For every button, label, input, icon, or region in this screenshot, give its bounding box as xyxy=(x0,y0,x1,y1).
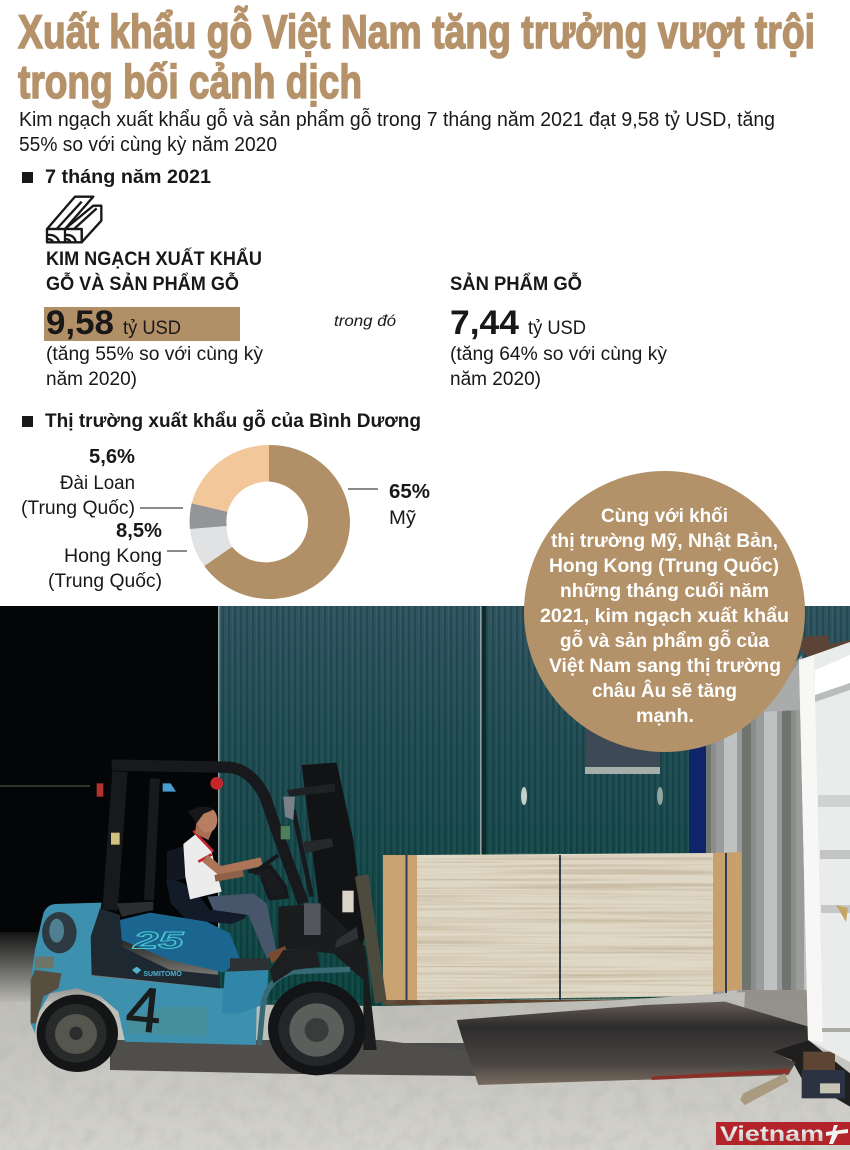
forklift rear counterweight and chassis xyxy=(31,902,358,1047)
dark warehouse interior xyxy=(0,606,219,1002)
icon: stacked timber beams xyxy=(47,197,101,242)
label: Mỹ 65% xyxy=(348,481,430,529)
rust block above container xyxy=(800,635,850,658)
intro text xyxy=(19,108,775,156)
callout circle: những tháng cuối năm xyxy=(560,581,769,602)
connector label: trong đó: trong đó xyxy=(334,313,396,330)
concrete ground xyxy=(0,992,850,1150)
callout circle: Việt Nam sang thị trường xyxy=(549,656,781,677)
forklift xyxy=(31,763,387,1075)
total export heading: GỖ VÀ SẢN PHẨM GỖ xyxy=(46,273,239,295)
total export block xyxy=(44,248,263,390)
section heading: 7 tháng năm 2021: 7 tháng năm 2021 xyxy=(45,167,211,188)
forklift overhead guard xyxy=(110,765,312,910)
total export heading xyxy=(46,248,262,295)
label: Hong Kong 8,5%: 8,5% xyxy=(116,520,162,542)
wood products block: SẢN PHẨM GỖ xyxy=(450,273,582,295)
label: Hong Kong 8,5% xyxy=(48,520,187,592)
callout circle: Cùng với khối xyxy=(601,506,728,527)
blue post xyxy=(689,746,706,853)
plywood stack xyxy=(383,852,742,1005)
container interior, corrugated xyxy=(706,655,808,1050)
intro text: Kim ngạch xuất khẩu gỗ và sản phẩm gỗ trong 7 tháng năm 2021 đạt 9,58 tỷ USD, tăng xyxy=(19,108,775,131)
driver xyxy=(166,807,287,963)
callout circle: mạnh. xyxy=(636,706,694,727)
label: Đài Loan 5,6%: 5,6% xyxy=(89,446,135,468)
total export heading: KIM NGẠCH XUẤT KHẨU xyxy=(46,248,262,270)
callout circle: thị trường Mỹ, Nhật Bản, xyxy=(551,531,778,552)
label: Đài Loan 5,6% xyxy=(21,446,183,519)
title xyxy=(18,5,815,108)
label: Mỹ 65%: Mỹ xyxy=(389,508,417,529)
total export note: (tăng 55% so với cùng kỳ xyxy=(46,344,263,365)
callout circle: gỗ và sản phẩm gỗ của xyxy=(560,630,769,652)
wood products block: năm 2020) xyxy=(450,369,541,390)
highlighted value 9,58: tỷ USD xyxy=(123,318,181,339)
total export note: năm 2020) xyxy=(46,369,137,390)
wood products block: tỷ USD xyxy=(528,318,586,339)
forklift rear counterweight and chassis: 25 xyxy=(131,927,185,954)
label: Đài Loan 5,6%: (Trung Quốc) xyxy=(21,498,135,519)
callout circle: 2021, kim ngạch xuất khẩu xyxy=(540,606,789,627)
section heading: export markets: Thị trường xuất khẩu gỗ của Bình Dương xyxy=(45,410,421,432)
highlighted value 9,58: 9,58 xyxy=(46,304,114,342)
wood products block: 7,44 xyxy=(450,304,519,342)
wood products block: (tăng 64% so với cùng kỳ xyxy=(450,344,667,365)
steel loading ramp xyxy=(457,1002,850,1107)
callout circle: Hong Kong (Trung Quốc) xyxy=(549,556,779,577)
label: Hong Kong 8,5%: (Trung Quốc) xyxy=(48,571,162,592)
rear wheel xyxy=(37,995,118,1072)
label: Hong Kong 8,5%: Hong Kong xyxy=(64,546,162,567)
callout circle xyxy=(524,471,805,752)
label: Đài Loan 5,6%: Đài Loan xyxy=(60,473,135,494)
wood products block xyxy=(450,273,667,390)
forklift mast and lift carriage xyxy=(278,763,387,1050)
warning lights xyxy=(97,777,295,845)
logo: Vietnam+: Vietnam xyxy=(720,1123,824,1146)
donut chart xyxy=(190,445,350,599)
callout circle: châu Âu sẽ tăng xyxy=(592,680,737,702)
total export note xyxy=(46,344,263,390)
label: Mỹ 65%: 65% xyxy=(389,481,430,503)
highlighted value 9,58 xyxy=(44,304,240,342)
container door, white xyxy=(799,642,850,1062)
forklift rear counterweight and chassis: SUMITOMO xyxy=(143,971,182,978)
logo: Vietnam+ xyxy=(716,1122,850,1146)
green corrugated wall xyxy=(218,606,850,1006)
front wheel xyxy=(268,981,365,1075)
forklift rear counterweight and chassis: 4 xyxy=(123,974,165,1047)
intro text: 55% so với cùng kỳ năm 2020 xyxy=(19,134,277,156)
title: trong bối cảnh dịch xyxy=(18,55,362,108)
background photo: forklift loading plywood into a container xyxy=(0,606,850,1150)
